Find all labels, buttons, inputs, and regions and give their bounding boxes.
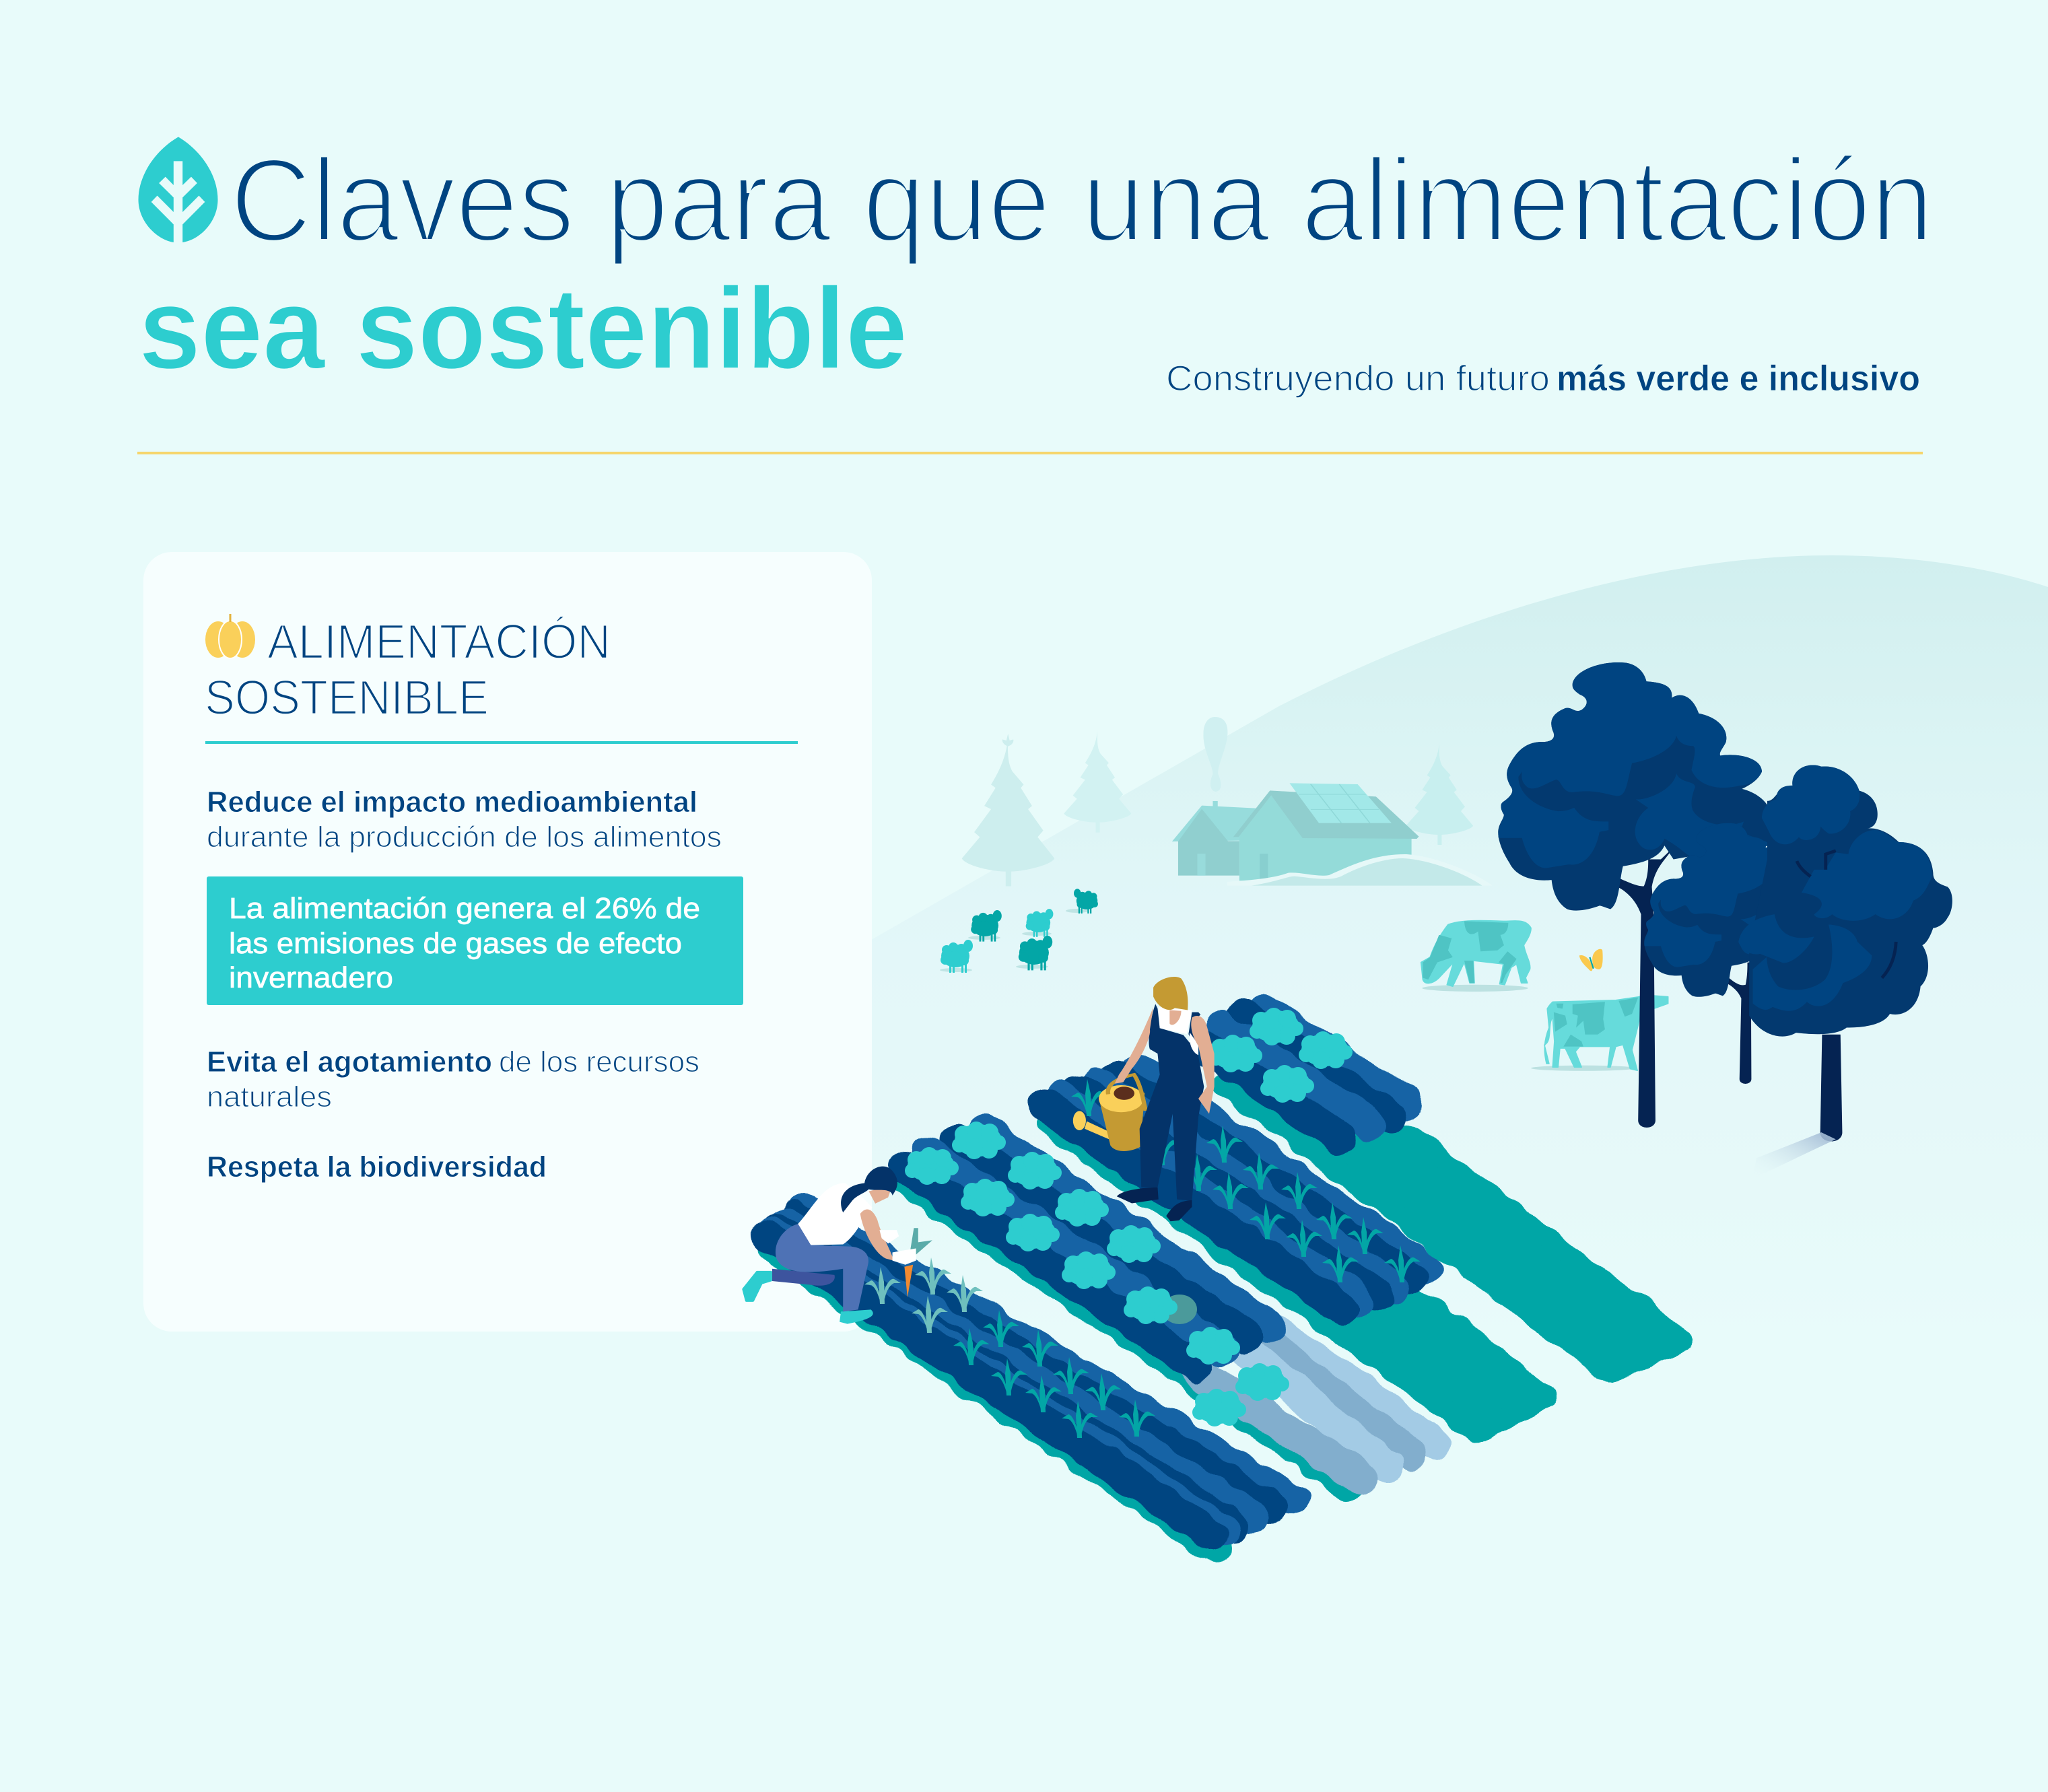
tree 1 — [1498, 662, 1771, 1128]
back leg — [772, 1269, 835, 1286]
panel heading: ALIMENTACIÓN — [267, 615, 611, 669]
strip 2 cabbage beds — [904, 1131, 1269, 1367]
tree 2 — [1644, 823, 1835, 1084]
text: evita el agotamiento: de los recursos — [499, 1045, 699, 1078]
tree 3 — [1738, 765, 1952, 1179]
strip 4 cabbage beds — [1205, 1010, 1407, 1138]
callout: 26% emissions — [207, 876, 743, 1005]
carrot leaves — [910, 1228, 932, 1255]
background scene: firs and farmhouse — [962, 717, 1493, 887]
gloves — [879, 1230, 916, 1265]
icon: leaf logo — [139, 137, 218, 242]
hair — [841, 1167, 897, 1212]
sheep flock — [940, 889, 1098, 973]
shoes — [743, 1272, 771, 1301]
arms — [1115, 1007, 1215, 1113]
header: title block — [139, 135, 1934, 399]
face — [868, 1185, 893, 1204]
snowy mound — [1227, 854, 1493, 886]
text: evita el agotamiento: naturales — [207, 1080, 332, 1113]
cows, butterfly and trees — [1421, 662, 1952, 1179]
title line 2: sea sostenible — [139, 264, 908, 393]
background hill — [808, 555, 2048, 1792]
shirt — [1159, 1007, 1198, 1055]
trousers — [776, 1224, 868, 1311]
panel heading: SOSTENIBLE — [205, 671, 489, 725]
subtitle: más verde e inclusivo — [1557, 359, 1920, 399]
solar panels — [1289, 783, 1392, 823]
strip 3 teal ground — [1047, 1124, 1547, 1433]
text: reduce el impacto — [207, 786, 722, 854]
field strips — [767, 1010, 1682, 1547]
arm — [860, 1210, 893, 1261]
text: evita el agotamiento — [207, 1045, 699, 1113]
cow grazing — [1421, 921, 1531, 992]
text: reduce el impacto: Reduce el impacto medioambiental — [207, 786, 697, 819]
fir tree right — [1406, 740, 1473, 845]
cabbages — [905, 1008, 1353, 1426]
leek plants strip 1 — [864, 1257, 1155, 1438]
overalls — [1140, 1004, 1204, 1201]
panel: alimentación sostenible — [143, 552, 872, 1332]
fir tree middle — [1064, 728, 1131, 833]
strip 4 teal ground — [1222, 1084, 1682, 1375]
callout: 26% emissions: invernadero — [229, 961, 393, 994]
watering can — [1073, 1074, 1146, 1151]
leek plants strip 3 — [1071, 1079, 1421, 1282]
icon: pumpkin — [205, 614, 255, 658]
subtitle: Construyendo un futuro — [1166, 359, 1550, 399]
callout: 26% emissions: La alimentación genera el 26% de — [229, 892, 700, 925]
hair — [1153, 977, 1188, 1010]
strip 3 leek beds — [1045, 1070, 1427, 1309]
text: reduce el impacto: durante la producción de los alimentos — [207, 821, 722, 854]
text: respeta la biodiversidad: Respeta la biodiversidad — [207, 1150, 547, 1183]
title line 1: Claves para que una alimentación — [230, 135, 1934, 267]
callout: 26% emissions: las emisiones de gases de efecto — [229, 927, 682, 960]
strip 2 teal ground — [903, 1178, 1351, 1486]
carrot — [904, 1265, 913, 1297]
farmer with watering can — [1073, 977, 1215, 1221]
strip 2 pale fading beds — [1197, 1332, 1434, 1479]
boots — [1117, 1187, 1192, 1221]
butterfly — [1579, 949, 1603, 971]
text: evita el agotamiento: Evita el agotamiento — [207, 1045, 492, 1078]
shirt — [798, 1183, 873, 1245]
chimney smoke — [1203, 717, 1227, 792]
panel heading — [205, 615, 611, 725]
strip 1 leek beds — [767, 1212, 1293, 1535]
strip 1 teal ground — [774, 1249, 1215, 1547]
subtitle — [1166, 359, 1920, 399]
cow standing — [1531, 995, 1668, 1071]
fir tree left — [962, 734, 1054, 887]
farmer kneeling with carrot — [743, 1167, 932, 1324]
farmhouse — [1172, 783, 1493, 886]
neck — [1169, 1010, 1182, 1025]
